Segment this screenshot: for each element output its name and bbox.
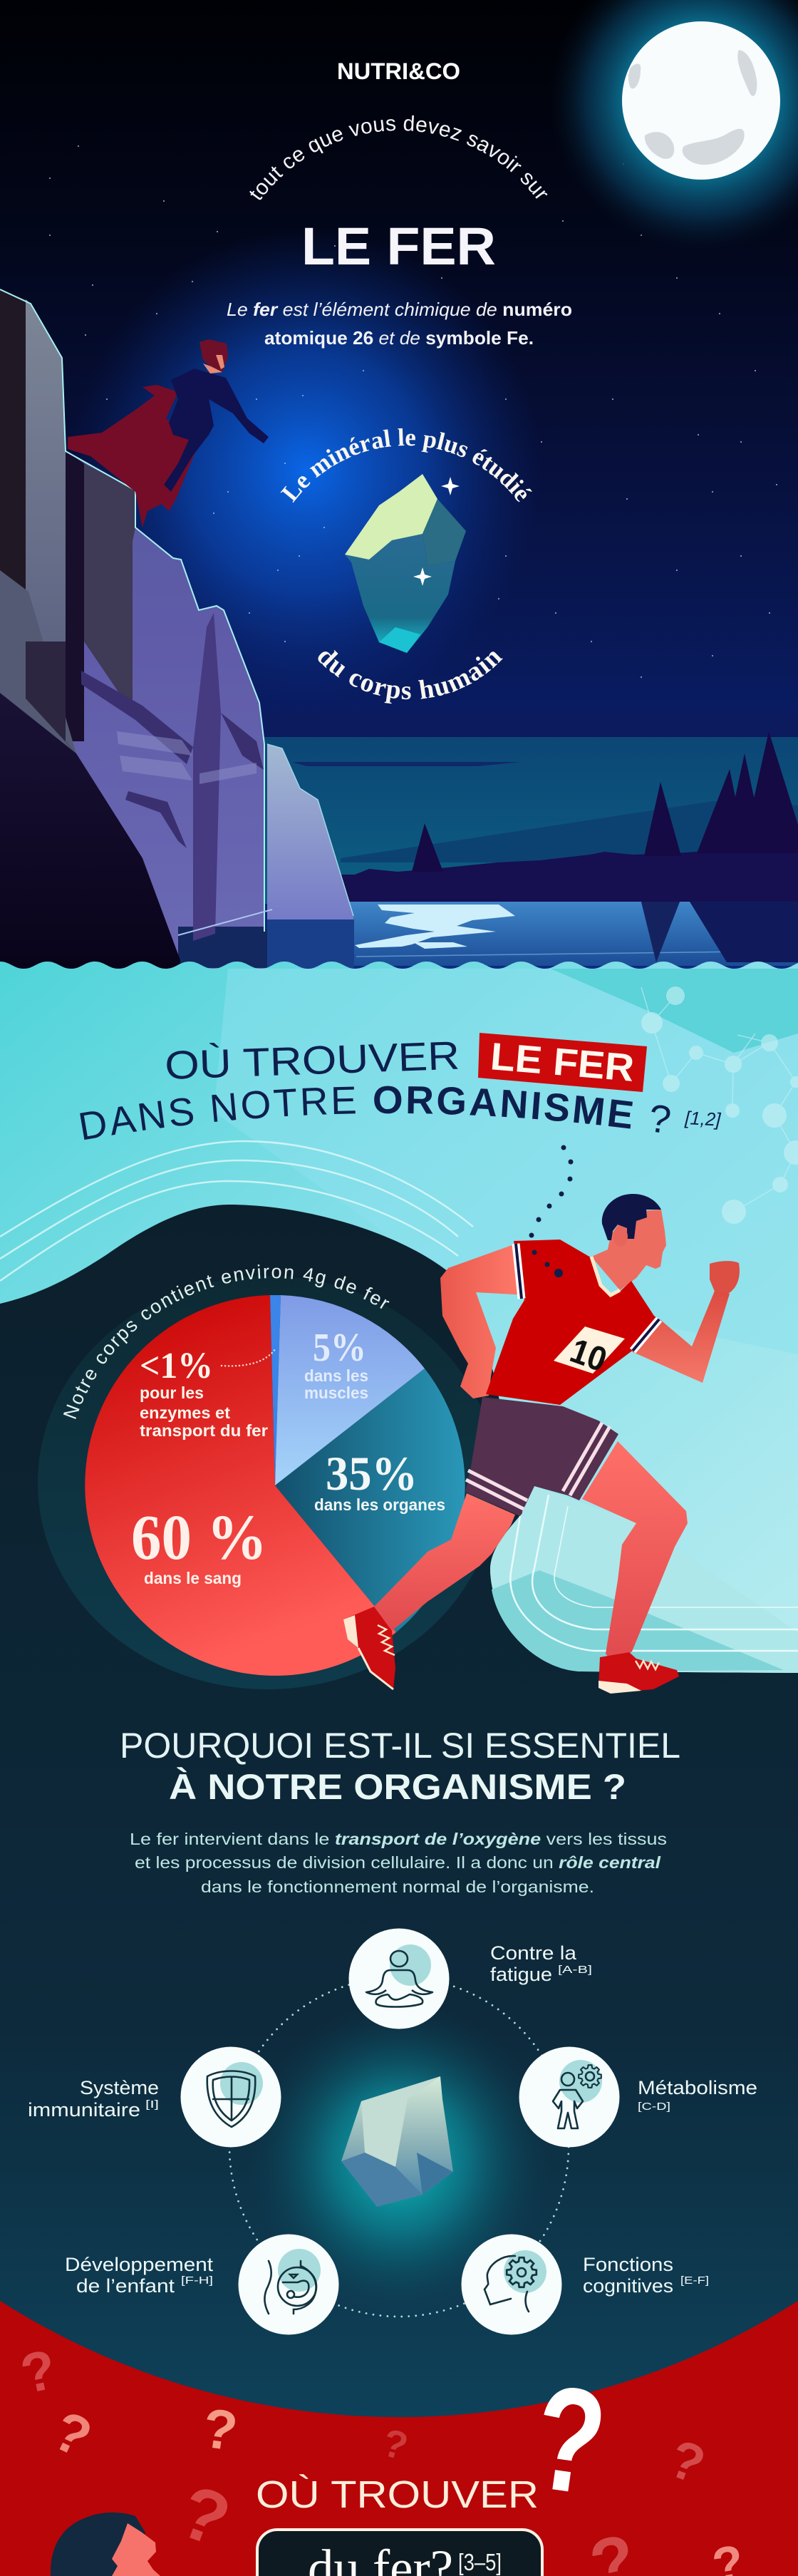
ear — [613, 1227, 628, 1247]
title: où trouver le fer dans notre organisme: OÙ TROUVER — [164, 1033, 460, 1088]
stars — [50, 146, 777, 959]
question marks: ? — [15, 2337, 61, 2406]
pie chart: iron distribution — [38, 1264, 495, 1689]
label 35 percent — [314, 1446, 445, 1514]
dots — [532, 1148, 571, 1264]
label — [490, 1942, 592, 1985]
bib 10 — [554, 1326, 625, 1379]
label under 1 percent: enzymes et — [140, 1403, 230, 1422]
hood — [200, 339, 228, 372]
neck and face — [591, 1210, 666, 1290]
shirt — [486, 1240, 659, 1405]
connector dots — [222, 1349, 275, 1366]
question marks: ? — [378, 2420, 413, 2469]
question marks: ? — [662, 2428, 712, 2495]
box: du fer — [257, 2530, 542, 2576]
title: LE FER: LE FER — [301, 217, 496, 276]
pie ring — [38, 1276, 497, 1689]
label 35 percent: dans les organes — [314, 1495, 445, 1514]
panel: night sky hero — [0, 0, 798, 969]
arc text: le minéral le plus étudié: Le minéral le plus étudié — [281, 428, 532, 503]
arc heading: tout ce que vous devez savoir sur: tout ce que vous devez savoir sur — [249, 115, 547, 200]
far cliff — [267, 744, 353, 966]
question marks — [15, 2337, 748, 2576]
paragraph: role of iron: Le fer intervient dans le transport de l’oxygène vers les tissus — [130, 1830, 667, 1848]
heading: pourquoi est-il si essentiel: À NOTRE ORGANISME ? — [169, 1767, 626, 1807]
label under 1 percent: transport du fer — [140, 1421, 268, 1440]
shorts — [465, 1397, 618, 1516]
label 5 percent: muscles — [304, 1384, 368, 1402]
label: Système — [80, 2077, 159, 2098]
wedge 60 percent blood — [85, 1295, 396, 1676]
arc text: du corps humain: du corps humain — [318, 650, 503, 704]
label 5 percent: dans les — [304, 1366, 368, 1385]
fist — [710, 1261, 740, 1294]
shirt collar and stripes — [591, 1257, 620, 1295]
running track — [490, 1486, 798, 1673]
label: cognitives — [583, 2275, 673, 2297]
question marks: ? — [169, 2469, 241, 2563]
title: où trouver le fer dans notre organisme: DANS NOTRE ORGANISME ? — [80, 1086, 670, 1140]
question marks: ? — [524, 2354, 615, 2528]
logo: NUTRI&CO: NUTRI&CO — [337, 58, 460, 84]
central glow — [246, 1999, 552, 2320]
title: où trouver le fer dans notre organisme: [1,2] — [684, 1107, 722, 1130]
cape — [68, 385, 197, 527]
item: immune system — [28, 2047, 281, 2147]
label 5 percent: 5% — [313, 1326, 366, 1370]
label under 1 percent: <1% — [140, 1346, 213, 1386]
question marks: ? — [199, 2396, 242, 2463]
label: [C-D] — [638, 2101, 670, 2113]
label — [583, 2254, 709, 2297]
question marks: ? — [43, 2399, 101, 2470]
main cliff — [0, 289, 265, 969]
superhero with cape — [68, 339, 269, 527]
label under 1 percent: pour les — [140, 1384, 204, 1402]
icon: pregnancy — [238, 2234, 339, 2335]
cliff outline — [0, 289, 264, 932]
item: fatigue — [349, 1929, 592, 2029]
back leg — [374, 1493, 515, 1631]
paragraph: role of iron — [130, 1830, 667, 1896]
body — [164, 369, 269, 492]
front arm — [631, 1291, 730, 1383]
wedge 5 percent muscles — [275, 1295, 425, 1485]
icon: meditation — [349, 1929, 449, 2029]
label: Développement — [65, 2254, 214, 2275]
wedge under 1 percent — [270, 1295, 281, 1485]
label 60 percent: dans le sang — [144, 1569, 242, 1587]
central crystal — [341, 2076, 453, 2207]
intro text: atomique 26 et de symbole Fe. — [264, 327, 534, 349]
item: child development — [65, 2234, 339, 2335]
moon reflection — [355, 905, 515, 949]
label: immunitaire — [28, 2099, 140, 2121]
label — [638, 2077, 757, 2113]
label: Fonctions — [583, 2254, 673, 2275]
paragraph: role of iron: dans le fonctionnement normal de l’organisme. — [201, 1877, 594, 1896]
heading: où trouver du fer: OÙ TROUVER — [256, 2473, 539, 2516]
dotted ring — [229, 1977, 569, 2317]
label: [I] — [145, 2098, 159, 2111]
trees — [412, 731, 798, 872]
moon — [548, 0, 798, 254]
label 35 percent: 35% — [326, 1446, 418, 1500]
label 60 percent: 60 % — [131, 1503, 267, 1573]
red label: le fer: LE FER — [489, 1035, 636, 1090]
label: [F-H] — [181, 2274, 213, 2287]
left shoe — [343, 1607, 395, 1689]
floating iron crystal — [345, 474, 466, 653]
item: metabolism — [519, 2047, 757, 2147]
dark foreground rock — [0, 693, 180, 969]
intro text — [227, 299, 572, 349]
dark background with blob — [0, 1205, 798, 2576]
heading: pourquoi est-il si essentiel: POURQUOI EST-IL SI ESSENTIEL — [120, 1726, 680, 1766]
woman — [51, 2513, 160, 2576]
paragraph: role of iron: et les processus de division cellulaire. Il a donc un rôle central — [135, 1853, 661, 1872]
cliffs — [0, 289, 354, 969]
box: du fer: [3–5] — [458, 2549, 502, 2575]
label 5 percent — [304, 1326, 368, 1402]
label — [65, 2254, 214, 2297]
label — [28, 2077, 159, 2121]
wedge 35 percent organs — [275, 1369, 465, 1632]
intro text: Le fer est l’élément chimique de numéro — [227, 299, 572, 320]
title: où trouver le fer dans notre organisme — [80, 1033, 722, 1140]
front leg — [582, 1441, 688, 1663]
back arm — [440, 1245, 527, 1398]
arc caption: Notre corps contient environ 4g de fer — [63, 1264, 389, 1419]
tree reflections — [591, 902, 798, 962]
panel: organism section background — [0, 962, 798, 1711]
distant landscape: sea, hills and trees — [264, 711, 798, 966]
right shoe — [598, 1652, 679, 1694]
label: [E-F] — [680, 2274, 709, 2287]
bib 10: 10 — [565, 1332, 611, 1379]
hair — [602, 1194, 661, 1240]
heading: pourquoi est-il si essentiel — [120, 1726, 680, 1807]
red curved section — [0, 2301, 798, 2576]
item: cognitive functions — [462, 2234, 709, 2335]
rock cracks — [193, 613, 221, 941]
label: de l’enfant — [76, 2275, 175, 2297]
face — [203, 355, 224, 373]
label: [A-B] — [558, 1964, 592, 1976]
label: Contre la — [490, 1942, 577, 1964]
label: fatigue — [490, 1964, 552, 1985]
icon: head and gear — [462, 2234, 561, 2335]
runner — [343, 1148, 740, 1694]
label under 1 percent — [140, 1346, 268, 1440]
molecular network — [641, 986, 798, 1224]
wave lines — [0, 1141, 473, 1281]
label: Métabolisme — [638, 2077, 757, 2098]
icon: person and gear — [519, 2047, 620, 2147]
icon: shield — [181, 2047, 281, 2147]
